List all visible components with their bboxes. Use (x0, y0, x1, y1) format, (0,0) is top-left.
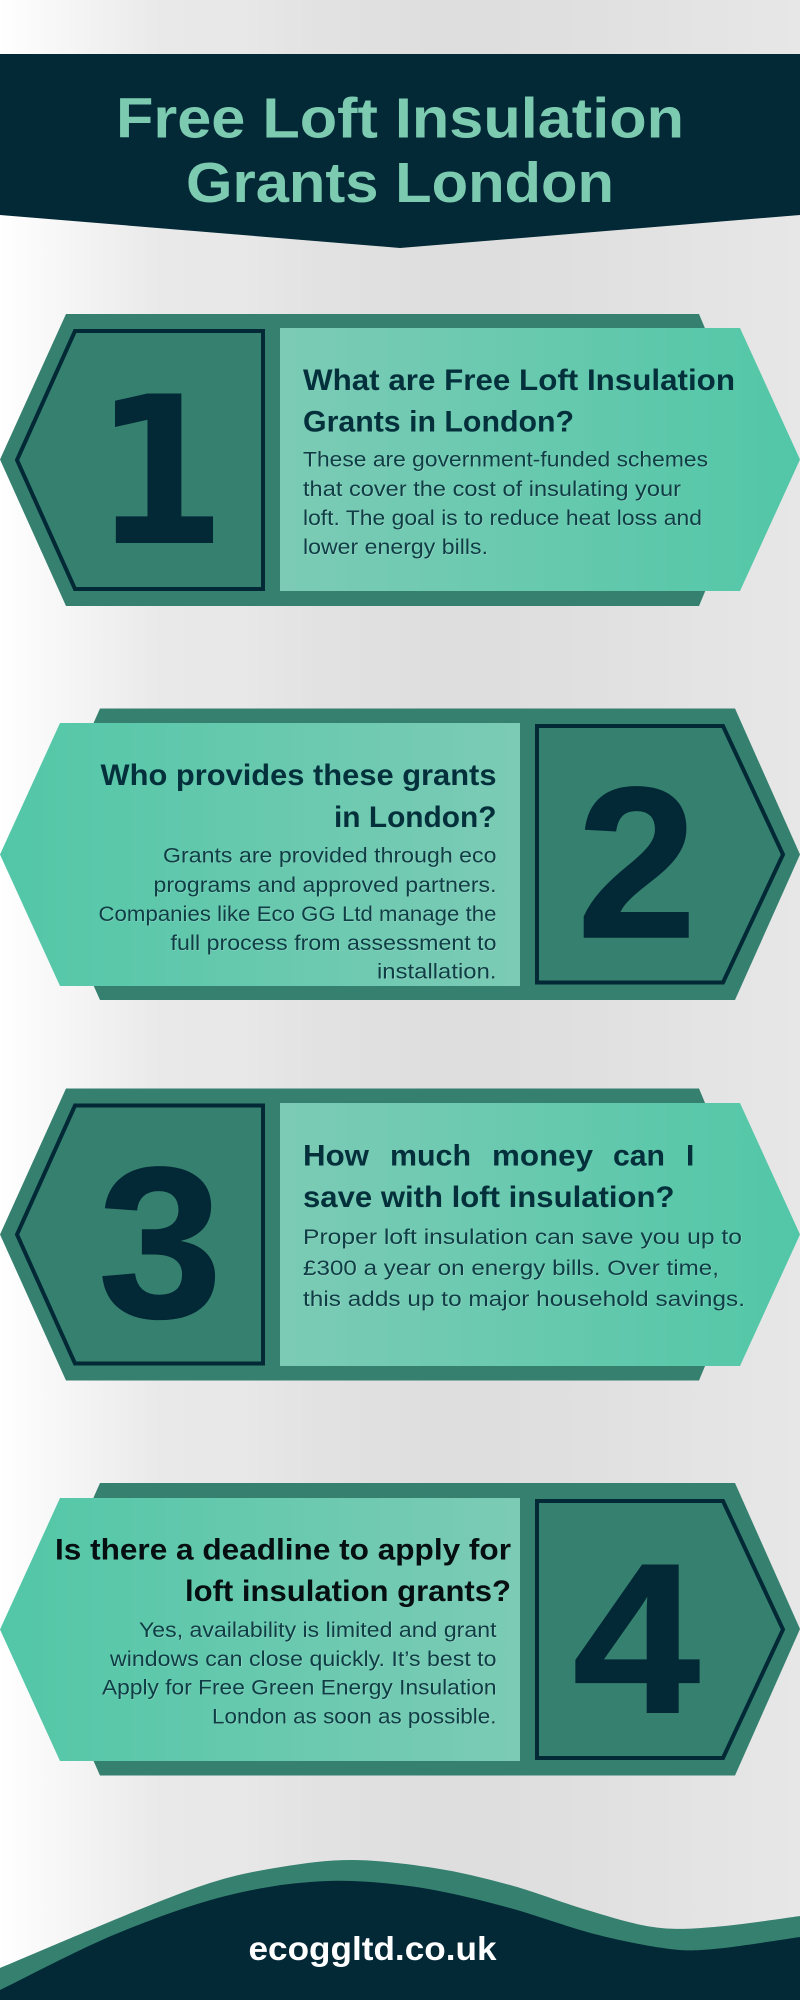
footer (0, 1860, 800, 2000)
panel: question 3 (0, 1088, 800, 1380)
heading 4: loft insulation grants? (185, 1575, 511, 1608)
body text 3: Proper loft insulation can save you up to (303, 1225, 742, 1249)
body text 2 (98, 844, 497, 984)
body text 2: full process from assessment to (170, 931, 497, 955)
heading 1: Grants in London? (303, 406, 574, 438)
title: Grants London (186, 151, 614, 215)
heading 4 (55, 1534, 511, 1608)
title: Free Loft Insulation (116, 86, 684, 150)
text panel 4 (0, 1498, 520, 1761)
heading 2 (100, 759, 496, 834)
footer wave: teal (0, 1860, 800, 2000)
header banner (0, 54, 800, 248)
body text 2: programs and approved partners. (154, 873, 496, 897)
number box 3 (17, 1106, 263, 1364)
number box 4 (537, 1501, 783, 1758)
footer wave: dark (0, 1881, 800, 2000)
body text 4: Yes, availability is limited and grant (139, 1618, 497, 1642)
body text 1 (303, 448, 708, 559)
body text 3 (303, 1225, 745, 1311)
body text 4: windows can close quickly. It’s best to (109, 1647, 497, 1671)
heading 3: money (492, 1140, 593, 1172)
text panel 1 (280, 328, 800, 591)
heading 3: much (390, 1140, 471, 1172)
body text 3: £300 a year on energy bills. Over time, (303, 1256, 719, 1280)
heading 2: Who provides these grants (100, 759, 496, 792)
heading 3: can (613, 1140, 665, 1172)
body text 1: loft. The goal is to reduce heat loss and (303, 506, 702, 530)
heading 3: How (303, 1140, 370, 1172)
number box 3: 3 (98, 1123, 222, 1363)
panel: question 1 (0, 314, 800, 606)
body text 2: Grants are provided through eco (163, 844, 497, 868)
heading 2: in London? (334, 801, 496, 834)
body text 1: lower energy bills. (303, 535, 488, 559)
panel: question 2 (0, 708, 800, 1000)
body text 2: installation. (377, 960, 496, 984)
text panel 2 (0, 723, 520, 986)
body text 4 (102, 1618, 497, 1728)
heading 1 (303, 364, 735, 438)
heading 3: save with loft insulation? (303, 1181, 674, 1214)
heading 3: I (686, 1140, 694, 1172)
body text 4: London as soon as possible. (212, 1704, 496, 1728)
heading 1: What are Free Loft Insulation (303, 364, 735, 397)
body text 3: this adds up to major household savings. (303, 1287, 745, 1311)
website url: ecoggltd.co.uk (248, 1930, 497, 1967)
number box 2 (537, 726, 783, 983)
body text 4: Apply for Free Green Energy Insulation (102, 1676, 496, 1700)
number box 4: 4 (573, 1519, 700, 1757)
heading 3 (303, 1140, 694, 1214)
body text 2: Companies like Eco GG Ltd manage the (98, 902, 496, 926)
panel: question 4 (0, 1483, 800, 1776)
number box 1: 1 (94, 352, 226, 592)
number box 2: 2 (577, 742, 697, 983)
body text 1: These are government-funded schemes (303, 448, 708, 472)
body text 1: that cover the cost of insulating your (303, 477, 681, 501)
number box 1 (17, 331, 263, 592)
text panel 3 (280, 1103, 800, 1366)
heading 4: Is there a deadline to apply for (55, 1534, 511, 1566)
title (116, 86, 684, 215)
